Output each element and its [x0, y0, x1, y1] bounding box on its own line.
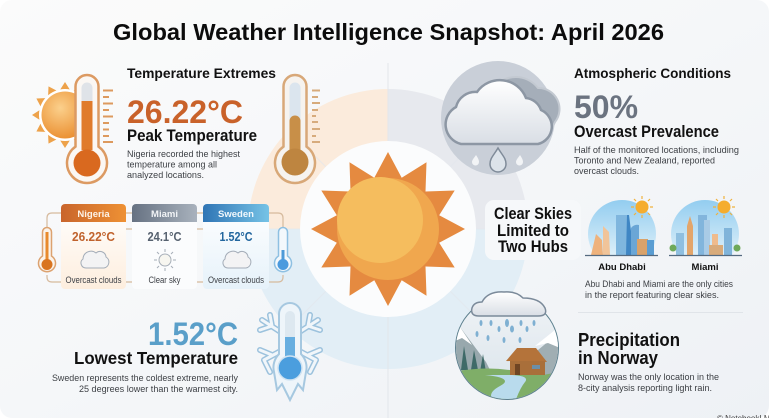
- icon: rain cloud in grey circle: [441, 61, 560, 175]
- callout: clear skies: Limited to: [497, 222, 569, 240]
- stat: peak temperature value: 26.22°C: [127, 94, 243, 130]
- callout: clear skies: Clear Skies: [494, 205, 572, 223]
- text: precipitation description: 8-city analysis reporting light rain.: [578, 383, 712, 394]
- card: Sweden: [203, 204, 269, 289]
- text: overcast description: Toronto and New Zealand, reported: [574, 156, 715, 166]
- text: peak temperature description: Nigeria recorded the highest: [127, 149, 240, 160]
- card: Sweden: Sweden: [218, 209, 254, 220]
- text: precipitation description: Norway was the only location in the: [578, 372, 719, 383]
- label: Abu Dhabi: Abu Dhabi: [598, 262, 646, 273]
- card: Nigeria: [61, 204, 126, 289]
- icon: rain over Norwegian cabin: [455, 291, 559, 400]
- comparison cards: [38, 204, 292, 289]
- card: Nigeria: 26.22°C: [72, 229, 116, 244]
- central quadrant dial: [246, 63, 530, 418]
- text: lowest temperature description: Sweden represents the coldest extreme, nearly: [52, 373, 238, 384]
- stat: overcast percentage: 50%: [574, 89, 638, 125]
- card: Sweden: 1.52°C: [220, 229, 253, 244]
- icon: frozen thermometer with snowflake: [260, 303, 320, 400]
- text: overcast description: Half of the monitored locations, including: [574, 145, 739, 156]
- card: Nigeria: Nigeria: [77, 209, 110, 220]
- icon: Abu Dhabi skyline: [585, 196, 658, 256]
- text: peak temperature description: temperature among all: [127, 160, 217, 170]
- label: lowest temperature: Lowest Temperature: [74, 348, 238, 368]
- callout: clear skies: [485, 200, 581, 260]
- icon: small cold thermometer: [274, 228, 292, 272]
- text: lowest temperature description: 25 degrees lower than the warmest city.: [79, 384, 238, 395]
- heading: temperature extremes: Temperature Extremes: [127, 65, 276, 81]
- card: Nigeria: Overcast clouds: [66, 275, 122, 285]
- callout: clear skies: Two Hubs: [498, 238, 568, 256]
- heading: precipitation in Norway: in Norway: [578, 347, 659, 368]
- label: Miami: Miami: [692, 262, 718, 273]
- connector lines: [47, 213, 283, 282]
- stat: lowest temperature value: 1.52°C: [148, 316, 238, 352]
- icon: central sun: [311, 152, 465, 306]
- text: clear skies description: in the report featuring clear skies.: [585, 290, 719, 301]
- card: Miami: [132, 204, 197, 289]
- icon: small warm thermometer: [38, 228, 56, 272]
- icon: centre warm thermometer: [275, 75, 320, 183]
- card: Miami: Miami: [151, 209, 178, 220]
- text: overcast description: overcast clouds.: [574, 166, 639, 177]
- title: Global Weather Intelligence Snapshot: April 2026: [113, 19, 664, 45]
- text: peak temperature description: analyzed locations.: [127, 170, 204, 181]
- text: clear skies description: Abu Dhabi and Miami are the only cities: [585, 279, 733, 290]
- icon: sun with hot thermometer: [32, 75, 113, 183]
- card: Sweden: Overcast clouds: [208, 275, 264, 285]
- heading: precipitation in Norway: Precipitation: [578, 329, 680, 350]
- label: overcast prevalence: Overcast Prevalence: [574, 123, 719, 141]
- heading: atmospheric conditions: Atmospheric Conditions: [574, 65, 731, 81]
- card: Miami: 24.1°C: [148, 229, 182, 244]
- card: Miami: Clear sky: [148, 275, 181, 285]
- icon: Miami skyline: [669, 196, 742, 256]
- label: peak temperature: Peak Temperature: [127, 127, 257, 145]
